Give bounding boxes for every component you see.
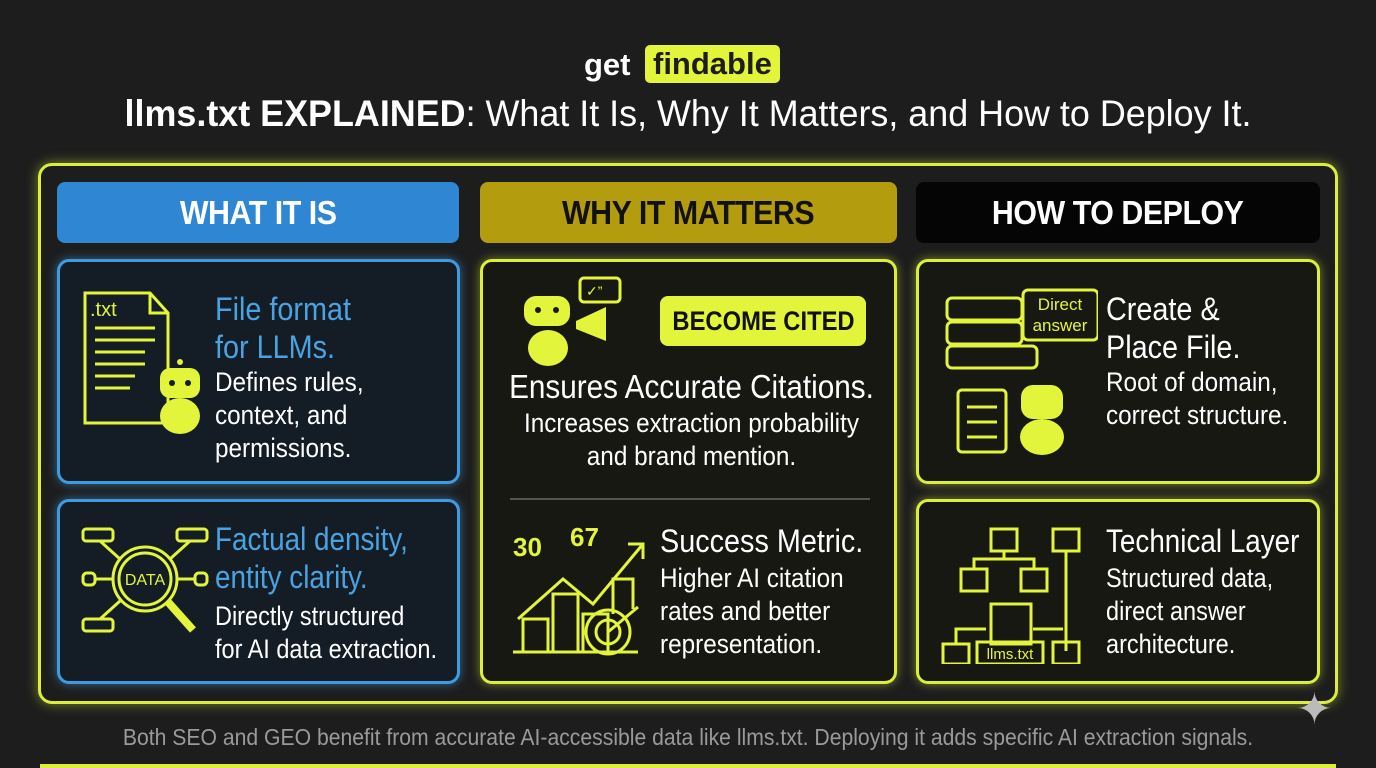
panel: factual density: Directly structured [215,601,404,631]
panel: factual density: entity clarity. [215,559,368,595]
panel: create & place file: Create & [1106,291,1220,327]
panel: factual density [57,499,460,684]
header: what it is [57,182,459,243]
icon: server, direct answer, robot: answer [1033,316,1088,335]
panel: why it matters [480,259,897,684]
panel: file format: context, and [215,400,347,430]
panel: why it matters: Increases extraction probability [524,408,859,438]
header: what it is: WHAT IT IS [180,194,336,230]
panel: factual density: for AI data extraction. [215,634,437,664]
panel: create & place file [916,259,1320,484]
panel: why it matters: Ensures Accurate Citations. [509,368,874,405]
callout: become cited [660,296,866,346]
icon: data magnifier [82,528,208,632]
title: get findable: get [584,47,630,82]
panel: technical layer: Technical Layer [1106,523,1299,559]
icon: server, direct answer, robot [946,288,1098,455]
icon: server, direct answer, robot: Direct [1038,295,1082,314]
title: get findable [584,45,780,83]
panel: create & place file: Root of domain, [1106,367,1278,397]
panel: technical layer: direct answer [1106,596,1246,626]
subtitle: llms.txt EXPLAINED: What It Is, Why It Matters, and How to Deploy It. [125,93,1251,134]
icon: folder tree llms.txt: llms.txt [987,646,1034,663]
header: how to deploy: HOW TO DEPLOY [992,194,1244,230]
panel: why it matters: Success Metric. [660,523,863,559]
icon: sparkle: ✦ [1296,685,1333,734]
icon: robot megaphone [524,276,622,366]
chart icon: metric: 30 [513,532,542,562]
panel: file format: Defines rules, [215,367,364,397]
panel: why it matters: and brand mention. [587,441,796,471]
panel: technical layer: architecture. [1106,629,1235,659]
header: why it matters: WHY IT MATTERS [562,194,815,230]
icon: folder tree llms.txt [942,528,1080,664]
icon: robot megaphone: ✓” [586,283,603,299]
findable highlight: findable [653,46,772,81]
footer text: Both SEO and GEO benefit from accurate AI-accessible data like llms.txt. Deploying it adds specific AI extraction signals. [123,724,1253,750]
chart icon: metric [513,524,644,656]
panel: create & place file: Place File. [1106,329,1240,365]
callout: become cited: BECOME CITED [672,306,855,336]
outer frame [38,163,1338,704]
panel: factual density: Factual density, [215,521,408,557]
header: why it matters [480,182,897,243]
panel: technical layer [916,499,1320,684]
panel: file format: permissions. [215,433,351,463]
header: how to deploy [916,182,1320,243]
panel: why it matters: rates and better [660,596,830,626]
icon: txt file with robot: .txt [90,299,117,321]
panel: why it matters: Higher AI citation [660,563,844,593]
panel: file format [57,259,460,484]
panel: why it matters: representation. [660,629,822,659]
icon: data magnifier: DATA [125,572,165,589]
panel: file format: for LLMs. [215,329,335,365]
panel: create & place file: correct structure. [1106,400,1288,430]
icon: txt file with robot [84,292,200,434]
panel: file format: File format [215,291,351,327]
panel: technical layer: Structured data, [1106,563,1273,593]
